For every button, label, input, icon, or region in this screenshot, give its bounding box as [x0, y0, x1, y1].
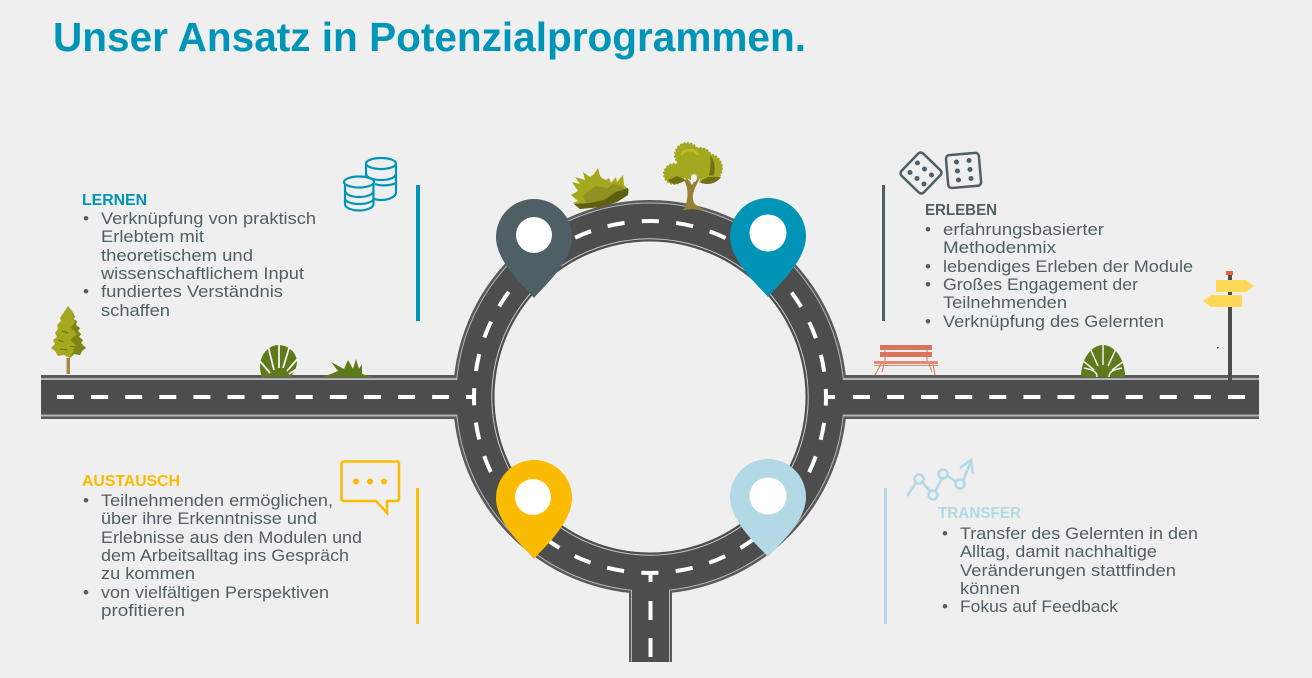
heading: Austausch: AUSTAUSCH: [82, 473, 180, 490]
bullet list: Erleben: Verknüpfung des Gelernten: [943, 312, 1164, 331]
bullet list: Austausch: zu kommen: [101, 564, 195, 583]
pin: light blue marker: [730, 459, 806, 557]
bullet list: Austausch: profitieren: [101, 601, 185, 620]
bullet list: Erleben: Teilnehmenden: [943, 293, 1067, 312]
accent bar: Austausch: [416, 488, 419, 624]
icon: oak tree on ring: [664, 143, 722, 211]
icon: speech bubble: [342, 462, 399, 513]
heading: Transfer: TRANSFER: [938, 505, 1021, 522]
bullet list: Austausch: •: [83, 583, 89, 602]
bullet list: Austausch: •: [83, 491, 89, 510]
heading: Erleben: ERLEBEN: [925, 202, 997, 219]
text block: Lernen: [82, 192, 316, 320]
pin: yellow marker: [496, 460, 572, 559]
heading: Lernen: LERNEN: [82, 192, 147, 209]
bullet list: Erleben: lebendiges Erleben der Module: [943, 257, 1193, 276]
bullet list: Lernen: •: [83, 209, 89, 228]
bullet list: Erleben: erfahrungsbasierter: [943, 220, 1104, 239]
bullet list: Austausch: dem Arbeitsalltag ins Gespräch: [101, 546, 349, 565]
bullet list: Erleben: Methodenmix: [943, 238, 1057, 257]
icon: signpost: [1203, 271, 1254, 380]
accent bar: Lernen: [416, 185, 420, 321]
bullet list: Lernen: theoretischem und: [101, 246, 253, 265]
text block: Erleben: [925, 202, 1193, 331]
road network: roundabout with three arms: [41, 200, 1259, 662]
bullet list: Transfer: •: [942, 524, 948, 543]
icon: pine tree: [51, 306, 86, 374]
bullet list: Austausch: von vielfältigen Perspektiven: [101, 583, 329, 602]
accent bar: Erleben: [882, 185, 885, 321]
icon: bench: [874, 345, 938, 375]
bullet list: Austausch: über ihre Erkenntnisse und: [101, 509, 317, 528]
bullet list: Transfer: [942, 524, 1198, 616]
bullet list: Lernen: schaffen: [101, 301, 170, 320]
bullet list: Transfer: Veränderungen stattfinden: [960, 561, 1176, 580]
bullet list: Austausch: Erlebnisse aus den Modulen und: [101, 528, 362, 547]
bullet list: Erleben: Großes Engagement der: [943, 275, 1138, 294]
text block: Transfer: [938, 505, 1198, 616]
icon: dice: [899, 151, 981, 195]
bullet list: Lernen: wissenschaftlichem Input: [100, 264, 304, 283]
icon: olive bush on ring: [571, 168, 629, 209]
bullet list: Lernen: Verknüpfung von praktisch: [101, 209, 316, 228]
bullet list: Transfer: Alltag, damit nachhaltige: [960, 542, 1157, 561]
bullet list: Lernen: [83, 209, 316, 320]
bullet list: Lernen: fundiertes Verständnis: [101, 282, 283, 301]
bullet list: Austausch: [83, 491, 362, 620]
bullet list: Lernen: Erlebtem mit: [101, 227, 204, 246]
bullet list: Lernen: •: [83, 282, 89, 301]
bullet list: Transfer: Fokus auf Feedback: [960, 597, 1119, 616]
bullet list: Transfer: •: [942, 597, 948, 616]
icon: fan bush right: [1081, 345, 1125, 377]
bullet list: Erleben: •: [925, 312, 931, 331]
bullet list: Erleben: •: [925, 220, 931, 239]
pin: teal marker: [730, 198, 806, 297]
icon: rising trend arrow: [907, 460, 973, 500]
bullet list: Erleben: •: [925, 257, 931, 276]
pin: grey marker: [496, 199, 572, 298]
bullet list: Erleben: •: [925, 275, 931, 294]
small stray dot: [1217, 347, 1218, 348]
icon: fan bush left: [259, 344, 300, 377]
bullet list: Transfer: Transfer des Gelernten in den: [960, 524, 1198, 543]
icon: coin stacks: [344, 158, 396, 210]
bullet list: Erleben: [925, 220, 1193, 331]
accent bar: Transfer: [884, 488, 887, 624]
title: Unser Ansatz in Potenzialprogrammen.: [53, 14, 806, 60]
icon: low grass bush: [323, 359, 373, 377]
text block: Austausch: [82, 473, 362, 620]
bullet list: Austausch: Teilnehmenden ermöglichen,: [101, 491, 333, 510]
bullet list: Transfer: können: [960, 579, 1020, 598]
